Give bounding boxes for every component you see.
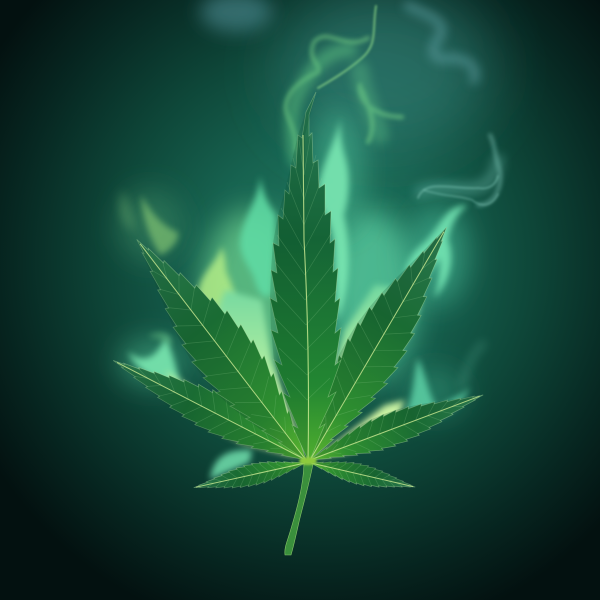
smoke: right swirl lower [424,190,498,205]
wisp: right curl haze [360,70,380,135]
green wisps above the leaf tip [286,6,402,160]
flame: yellow left [198,246,242,345]
leaflet: lower left [104,343,315,478]
glow: lower left flame [118,338,186,386]
glow: around tall flame [312,110,364,230]
glow: right flame [408,205,468,305]
flame: lower left arm [148,333,172,345]
leaf centre node [299,457,317,465]
flame: faint right wisp [462,342,485,388]
flame: left of top leaflet [240,175,276,297]
wisp: long curl from top [318,6,376,88]
soft glow zones behind the leaf [118,0,490,416]
leaflet: lower right [304,379,489,476]
smoke wisps [200,0,500,205]
wisp: broad haze [292,50,350,160]
smoke: top left [200,0,272,32]
glow: lower right flame [405,368,465,416]
smoke: right swirl upper [478,135,500,205]
smoke: right swirl haze [420,160,498,192]
glow: upper haze [280,0,490,150]
leaflet: bottom right [309,453,418,497]
flame: far left [141,195,178,255]
wisp: right curl [360,85,402,142]
flame: tall right of top leaflet [318,112,349,320]
flame: under left leaflets [210,450,252,480]
leaflet: top centre [270,92,341,462]
bright heat between leaflets [165,285,421,458]
flame: lower left bright [128,336,180,383]
flame: right lower [402,358,470,421]
leaflet: bottom left [191,452,307,498]
wisp: left curl [286,37,368,150]
glow: left of centre [202,210,298,380]
leaf [104,92,489,555]
flame: right, curling [404,205,468,298]
glow: right of centre [328,210,416,380]
smoke: top right strand [408,6,475,80]
flame: far left faint [120,190,134,232]
leaflet: upper right [285,212,472,475]
flames [120,112,485,480]
leaflet: upper left [112,220,331,479]
glow: far left flame [118,189,182,261]
leaf stem [285,464,313,555]
smoke: right swirl arc [418,176,498,198]
